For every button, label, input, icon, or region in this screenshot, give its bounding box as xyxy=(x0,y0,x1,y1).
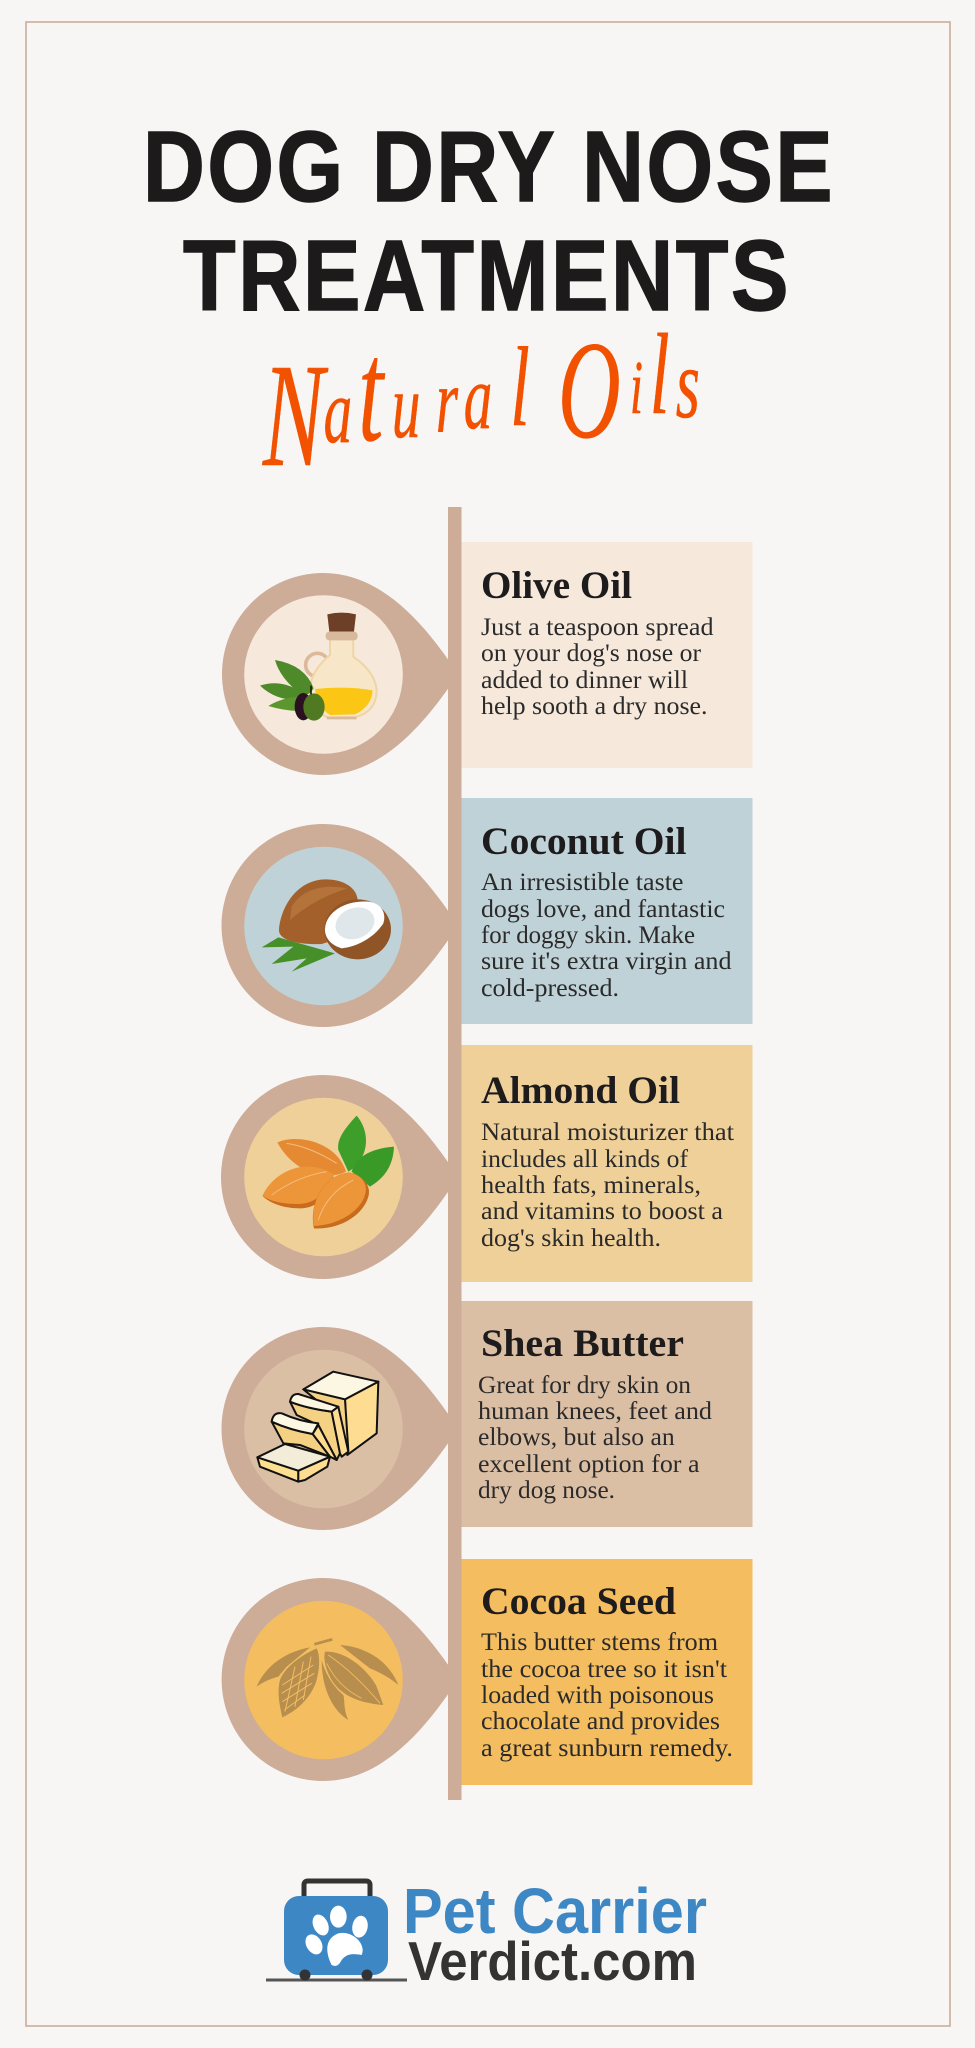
subtitle: Natural Oils: r xyxy=(436,350,458,452)
panel: almond oil xyxy=(221,1045,752,1282)
shea butter description: human knees, feet and xyxy=(478,1398,713,1425)
cocoa seed card xyxy=(462,1559,752,1785)
icon: pet carrier with paw xyxy=(266,1881,407,1980)
shea butter heading: Shea Butter xyxy=(481,1322,684,1365)
shea butter description: excellent option for a xyxy=(478,1451,700,1478)
olive oil description: on your dog's nose or xyxy=(481,640,702,667)
cocoa seed description: the cocoa tree so it isn't xyxy=(481,1656,727,1683)
olive oil description: Just a teaspoon spread xyxy=(481,614,714,641)
almond oil description: includes all kinds of xyxy=(481,1146,689,1173)
shea butter description: Great for dry skin on xyxy=(478,1372,692,1399)
cocoa seed description: chocolate and provides xyxy=(481,1708,720,1735)
icon: cocoa pods xyxy=(257,1639,398,1720)
subtitle: Natural Oils: a xyxy=(324,360,352,462)
subtitle: Natural Oils: l xyxy=(510,325,530,450)
almond oil description: and vitamins to boost a xyxy=(481,1198,723,1225)
coconut oil card xyxy=(462,798,752,1024)
coconut oil description xyxy=(481,869,732,1002)
coconut oil heading: Coconut Oil xyxy=(481,820,687,863)
subtitle: Natural Oils: u xyxy=(392,355,420,457)
logo text: Pet Carrier: Pet Carrier xyxy=(403,1875,707,1947)
coconut oil description: An irresistible taste xyxy=(481,869,684,896)
shea butter description xyxy=(478,1372,713,1504)
cocoa seed inner circle xyxy=(244,1601,403,1759)
almond oil description: dog's skin health. xyxy=(481,1225,661,1252)
title: TREATMENTS xyxy=(183,220,791,332)
almond oil pin xyxy=(221,1075,458,1279)
coconut oil inner circle xyxy=(244,847,403,1005)
almond oil heading: Almond Oil xyxy=(481,1069,680,1112)
cocoa seed description xyxy=(481,1629,733,1762)
cocoa seed heading: Cocoa Seed xyxy=(481,1580,676,1623)
shea butter description: dry dog nose. xyxy=(478,1477,615,1504)
olive oil pin xyxy=(222,573,458,775)
panel: coconut oil xyxy=(222,798,752,1027)
icon: olive oil bottle xyxy=(260,613,377,721)
cocoa seed description: loaded with poisonous xyxy=(481,1682,714,1709)
panel: shea butter xyxy=(222,1301,752,1530)
cocoa seed pin xyxy=(222,1578,458,1781)
almond oil description xyxy=(481,1119,734,1252)
title: DOG DRY NOSE xyxy=(143,111,835,223)
shea butter pin xyxy=(222,1327,458,1530)
olive oil heading: Olive Oil xyxy=(481,564,632,607)
cocoa seed description: a great sunburn remedy. xyxy=(481,1735,733,1762)
coconut oil description: sure it's extra virgin and xyxy=(481,948,732,975)
coconut oil pin xyxy=(222,824,458,1027)
timeline bar xyxy=(448,507,462,1800)
subtitle: Natural Oils: s xyxy=(676,328,700,439)
shea butter description: elbows, but also an xyxy=(478,1424,675,1451)
subtitle: Natural Oils: N xyxy=(262,333,328,497)
logo: Pet Carrier Verdict.com xyxy=(266,1875,707,1992)
coconut oil description: for doggy skin. Make xyxy=(481,922,695,949)
almond oil description: health fats, minerals, xyxy=(481,1172,701,1199)
icon: butter xyxy=(257,1372,378,1482)
title xyxy=(143,111,835,332)
icon: almonds xyxy=(263,1116,394,1228)
olive oil description: help sooth a dry nose. xyxy=(481,693,708,720)
almond oil inner circle xyxy=(244,1098,403,1256)
subtitle: Natural Oils: a xyxy=(464,346,492,448)
olive oil description xyxy=(481,614,714,720)
subtitle: Natural Oils: l xyxy=(650,311,670,438)
coconut oil description: cold-pressed. xyxy=(481,975,619,1002)
subtitle: Natural Oils: O xyxy=(558,313,621,468)
panel: olive oil xyxy=(222,542,752,775)
subtitle: Natural Oils: i xyxy=(630,346,643,430)
shea butter card xyxy=(462,1301,752,1527)
olive oil card xyxy=(462,542,752,768)
logo text: Verdict.com: Verdict.com xyxy=(408,1930,697,1992)
panel: cocoa seed xyxy=(222,1559,752,1785)
almond oil card xyxy=(462,1045,752,1282)
icon: coconut xyxy=(262,879,391,972)
coconut oil description: dogs love, and fantastic xyxy=(481,896,725,923)
olive oil inner circle xyxy=(244,595,403,754)
subtitle: Natural Oils: t xyxy=(358,313,385,472)
olive oil description: added to dinner will xyxy=(481,667,688,694)
almond oil description: Natural moisturizer that xyxy=(481,1119,734,1146)
shea butter inner circle xyxy=(244,1350,403,1508)
cocoa seed description: This butter stems from xyxy=(481,1629,719,1656)
